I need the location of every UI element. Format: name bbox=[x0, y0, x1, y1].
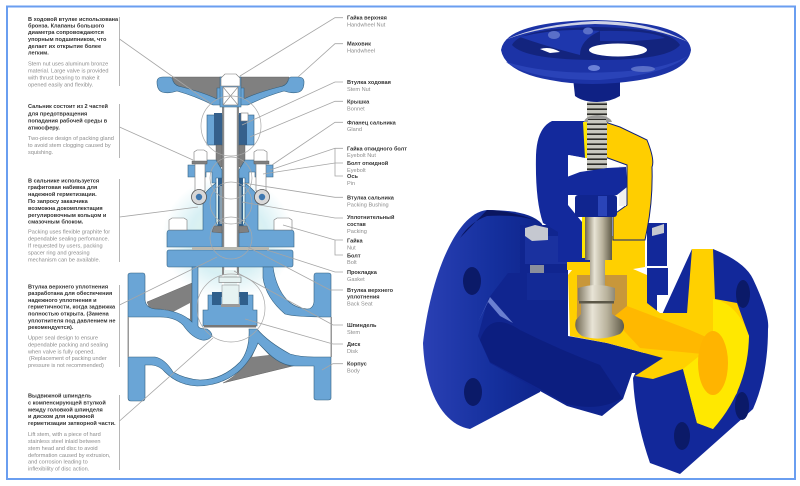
part labels: Маховик bbox=[347, 42, 371, 48]
part labels: Nut bbox=[347, 245, 356, 251]
part labels: Handwheel Nut bbox=[347, 23, 386, 29]
part labels: Прокладка bbox=[347, 270, 378, 276]
part labels: Stem Nut bbox=[347, 87, 371, 93]
text block: lift stem: inflexibility of disc action. bbox=[28, 466, 90, 472]
text block: lift stem: stem head and disc to avoid bbox=[28, 446, 98, 452]
text block: upper seal: герметичности, когда задвижка bbox=[28, 305, 116, 311]
text block: packing: регулировочным кольцом и bbox=[28, 213, 107, 219]
text block: packing gland: to avoid stem clogging caused by bbox=[28, 143, 111, 149]
text block: stem nut: легким. bbox=[28, 51, 49, 57]
text block: lift stem: Выдвижной шпиндель bbox=[28, 393, 92, 400]
disc bbox=[203, 277, 257, 328]
part labels: Handwheel bbox=[347, 49, 375, 55]
text block: lift stem: Lift stem, with a piece of hard bbox=[28, 432, 101, 438]
lower stem bbox=[585, 217, 612, 288]
text block: upper seal: разработана для обеспечения bbox=[28, 290, 112, 297]
part labels: Packing bbox=[347, 229, 367, 235]
text block: stem nut: with thrust bearing to make it bbox=[27, 75, 100, 81]
yellow liner around stem bbox=[582, 217, 585, 258]
handwheel bbox=[501, 20, 691, 102]
valve disc bbox=[575, 285, 624, 339]
gray web left bbox=[147, 283, 192, 322]
part labels bbox=[347, 14, 407, 375]
part labels: Eyebolt Nut bbox=[347, 153, 376, 159]
text block: packing: If requested by users, packing bbox=[28, 243, 103, 249]
text block: packing: dependable sealing perfomance. bbox=[28, 236, 110, 242]
text block: packing gland: атмосферу. bbox=[28, 124, 60, 131]
valve cutaway illustration bbox=[423, 20, 768, 474]
body upper left wall bbox=[128, 267, 212, 340]
text block: stem nut: Stem nut uses aluminum bronze bbox=[28, 62, 108, 68]
text block: packing: По запросу заказчика bbox=[28, 199, 89, 205]
bonnet flanges bbox=[525, 223, 668, 312]
part labels: Pin bbox=[347, 181, 355, 187]
right flange bbox=[633, 249, 768, 474]
text block: stem nut: делает их открытие более bbox=[28, 43, 101, 50]
stem nut hatch bbox=[223, 87, 238, 105]
body upper right wall bbox=[263, 267, 331, 317]
text block: packing: возможна докомплектация bbox=[28, 206, 103, 212]
window openings bbox=[569, 155, 626, 206]
text block: lift stem: герметизации затворной части. bbox=[28, 420, 116, 427]
text block: packing: надежной герметизации. bbox=[28, 191, 97, 198]
handwheel nut bbox=[221, 74, 240, 86]
part labels: Back Seat bbox=[347, 302, 373, 308]
left flange bbox=[423, 210, 560, 429]
part labels: Корпус bbox=[347, 362, 367, 368]
part labels: Болт bbox=[347, 253, 361, 259]
valve cavity bbox=[577, 275, 627, 335]
stem nut small part bbox=[241, 113, 248, 121]
text block: upper seal: pressure is not recommended) bbox=[28, 363, 104, 369]
text block: packing gland: Two-piece design of packing gland bbox=[28, 136, 114, 142]
text block: upper seal: уплотнителя под давлением не bbox=[28, 318, 116, 324]
text block: stem nut: material. Large valve is provided bbox=[28, 69, 109, 75]
part labels: уплотнения bbox=[347, 295, 380, 301]
text block: packing: Packing uses flexible graphite for bbox=[28, 229, 110, 235]
part labels: Packing Bushing bbox=[347, 202, 389, 208]
text block: stem nut: бронза. Клапаны большого bbox=[28, 23, 105, 30]
part labels: состав bbox=[347, 222, 366, 228]
text block: upper seal: надежного уплотнения и bbox=[28, 298, 97, 304]
body lower wall bbox=[128, 329, 331, 401]
part labels: Gland bbox=[347, 127, 362, 133]
part labels: Втулка сальника bbox=[347, 195, 395, 201]
technical cross-section diagram bbox=[128, 74, 332, 401]
part labels: Шпиндель bbox=[347, 323, 377, 329]
valve body bbox=[478, 225, 663, 416]
text block: upper seal: (Replacement of packing under bbox=[29, 356, 107, 362]
text block: stem nut: opened easily and flexibly. bbox=[28, 82, 94, 88]
yoke blue arm bbox=[536, 121, 590, 262]
threaded stem bbox=[587, 102, 607, 177]
part labels: Гайка откидного болт bbox=[347, 145, 407, 152]
gland bbox=[559, 167, 627, 217]
text block: packing gland: попадания рабочей среды в bbox=[28, 117, 108, 124]
text block: lift stem bbox=[28, 393, 116, 472]
part labels: Eyebolt bbox=[347, 168, 366, 174]
text block: upper seal: Upper seal design to ensure bbox=[28, 336, 98, 342]
part labels: Bolt bbox=[347, 260, 357, 266]
text block: stem nut: диаметра сопровождаются bbox=[28, 30, 104, 36]
part labels: Уплотнительный bbox=[347, 214, 395, 221]
yoke collar bbox=[584, 115, 612, 122]
part labels: Втулка верхнего bbox=[347, 288, 394, 294]
part labels: Диск bbox=[347, 342, 361, 348]
text block: lift stem: stainless steel inlaid between bbox=[28, 439, 100, 445]
text block: upper seal: рекомендуется). bbox=[28, 325, 74, 331]
text block: lift stem: с компенсирующей втулкой bbox=[28, 399, 106, 406]
yoke yellow section bbox=[605, 122, 653, 240]
part labels: Болт откидной bbox=[347, 160, 389, 167]
text block: stem nut: В ходовой втулке использована bbox=[28, 16, 119, 23]
text block: stem nut bbox=[27, 16, 119, 88]
text block: packing: смазочным блоком. bbox=[28, 219, 84, 226]
text block: packing gland: squishing. bbox=[28, 150, 54, 156]
text block: upper seal: Втулка верхнего уплотнения bbox=[28, 284, 108, 290]
part labels: Disk bbox=[347, 349, 358, 355]
gray web right bbox=[223, 343, 297, 383]
part labels: Ось bbox=[347, 174, 358, 180]
text block: upper seal: полностью открыта. (Замена bbox=[28, 311, 110, 317]
text block: lift stem: and corrosion leading to bbox=[28, 460, 88, 466]
part labels: Крышка bbox=[347, 99, 370, 105]
text column: feature descriptions bbox=[27, 16, 119, 472]
text block: packing gland: для предотвращения bbox=[28, 111, 87, 117]
detail circles bbox=[197, 96, 265, 342]
text block: packing bbox=[28, 178, 110, 263]
part labels: Gasket bbox=[347, 277, 365, 283]
text block: upper seal bbox=[27, 284, 116, 369]
part labels: Body bbox=[347, 369, 360, 375]
text block: lift stem: и диском для надежной bbox=[28, 413, 95, 420]
text block: stem nut: упорным подшипником, что bbox=[28, 37, 107, 43]
leader lines and brackets bbox=[120, 17, 343, 470]
text block: packing: spacer ring and greasing bbox=[28, 250, 90, 256]
text block: packing gland bbox=[28, 103, 114, 156]
text block: packing: графитовая набивка для bbox=[28, 184, 97, 191]
text block: upper seal: dependable packing and sealing bbox=[28, 343, 108, 349]
text block: packing: mechanism can be available. bbox=[28, 257, 101, 263]
part labels: Втулка ходовая bbox=[347, 80, 391, 86]
text block: packing: В сальнике используется bbox=[28, 178, 99, 184]
text block: lift stem: между головкой шпинделя bbox=[28, 406, 103, 413]
text block: lift stem: deformation caused by extrusion, bbox=[28, 453, 111, 459]
text block: packing gland: Сальник состоит из 2 частей bbox=[28, 103, 109, 110]
yellow cross-section of body bbox=[567, 236, 749, 429]
part labels: Гайка верхняя bbox=[347, 14, 387, 22]
part labels: Bonnet bbox=[347, 106, 365, 112]
part labels: Фланец сальника bbox=[347, 120, 397, 126]
part labels: Stem bbox=[347, 330, 360, 336]
part labels: Гайка bbox=[347, 238, 363, 245]
flange bore bbox=[683, 299, 749, 429]
text block: upper seal: when valve is fully opened. bbox=[27, 350, 95, 356]
